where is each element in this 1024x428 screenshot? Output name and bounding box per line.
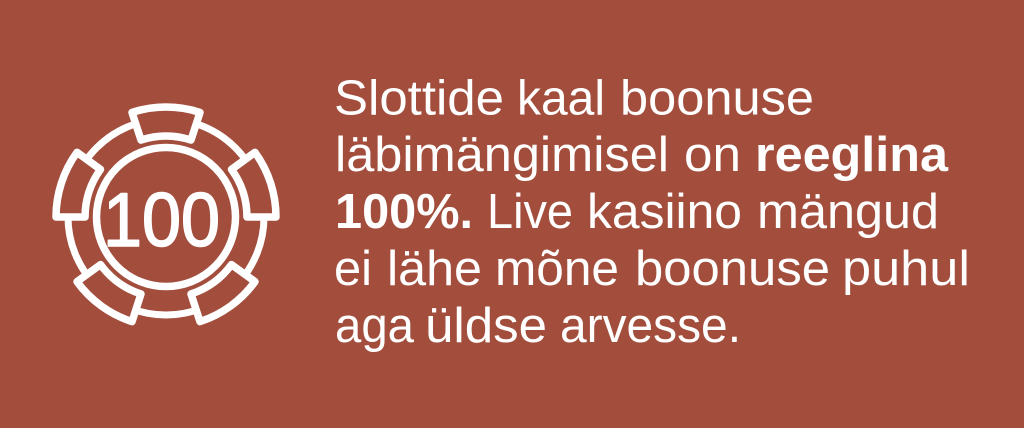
line 1 (334, 72, 814, 126)
line 3 (335, 185, 939, 239)
line 3: kasiino (587, 185, 742, 239)
line 5: arvesse. (560, 299, 741, 353)
line 3: mängud (757, 185, 939, 239)
text block: bonus wagering note (334, 72, 970, 353)
chip segment: lower right (184, 259, 258, 326)
line 1: Slottide (334, 72, 504, 126)
line 4: puhul (842, 242, 970, 296)
line 1: kaal (517, 72, 605, 126)
line 3: 100%. (335, 185, 473, 239)
chip segment: right (229, 151, 281, 226)
line 5: üldse (425, 299, 547, 353)
icon: casino chip with 100 (51, 107, 281, 326)
line 2: on (684, 128, 741, 182)
line 2: läbimängimisel (335, 128, 669, 182)
line 4: ei (334, 242, 372, 296)
line 4 (334, 242, 970, 296)
line 1: boonuse (620, 72, 814, 126)
line 4: mõne (495, 242, 619, 296)
chip segment: left (51, 151, 103, 226)
line 5: aga (335, 299, 415, 353)
chip segment: top (132, 107, 200, 140)
line 2 (335, 128, 949, 182)
line 3: Live (487, 185, 573, 239)
chip value: 100 (103, 178, 220, 263)
line 4: lähe (387, 242, 482, 296)
line 5 (335, 299, 741, 353)
line 4: boonuse (635, 242, 830, 296)
chip segment: lower left (74, 259, 148, 326)
line 2: reeglina (755, 128, 949, 182)
